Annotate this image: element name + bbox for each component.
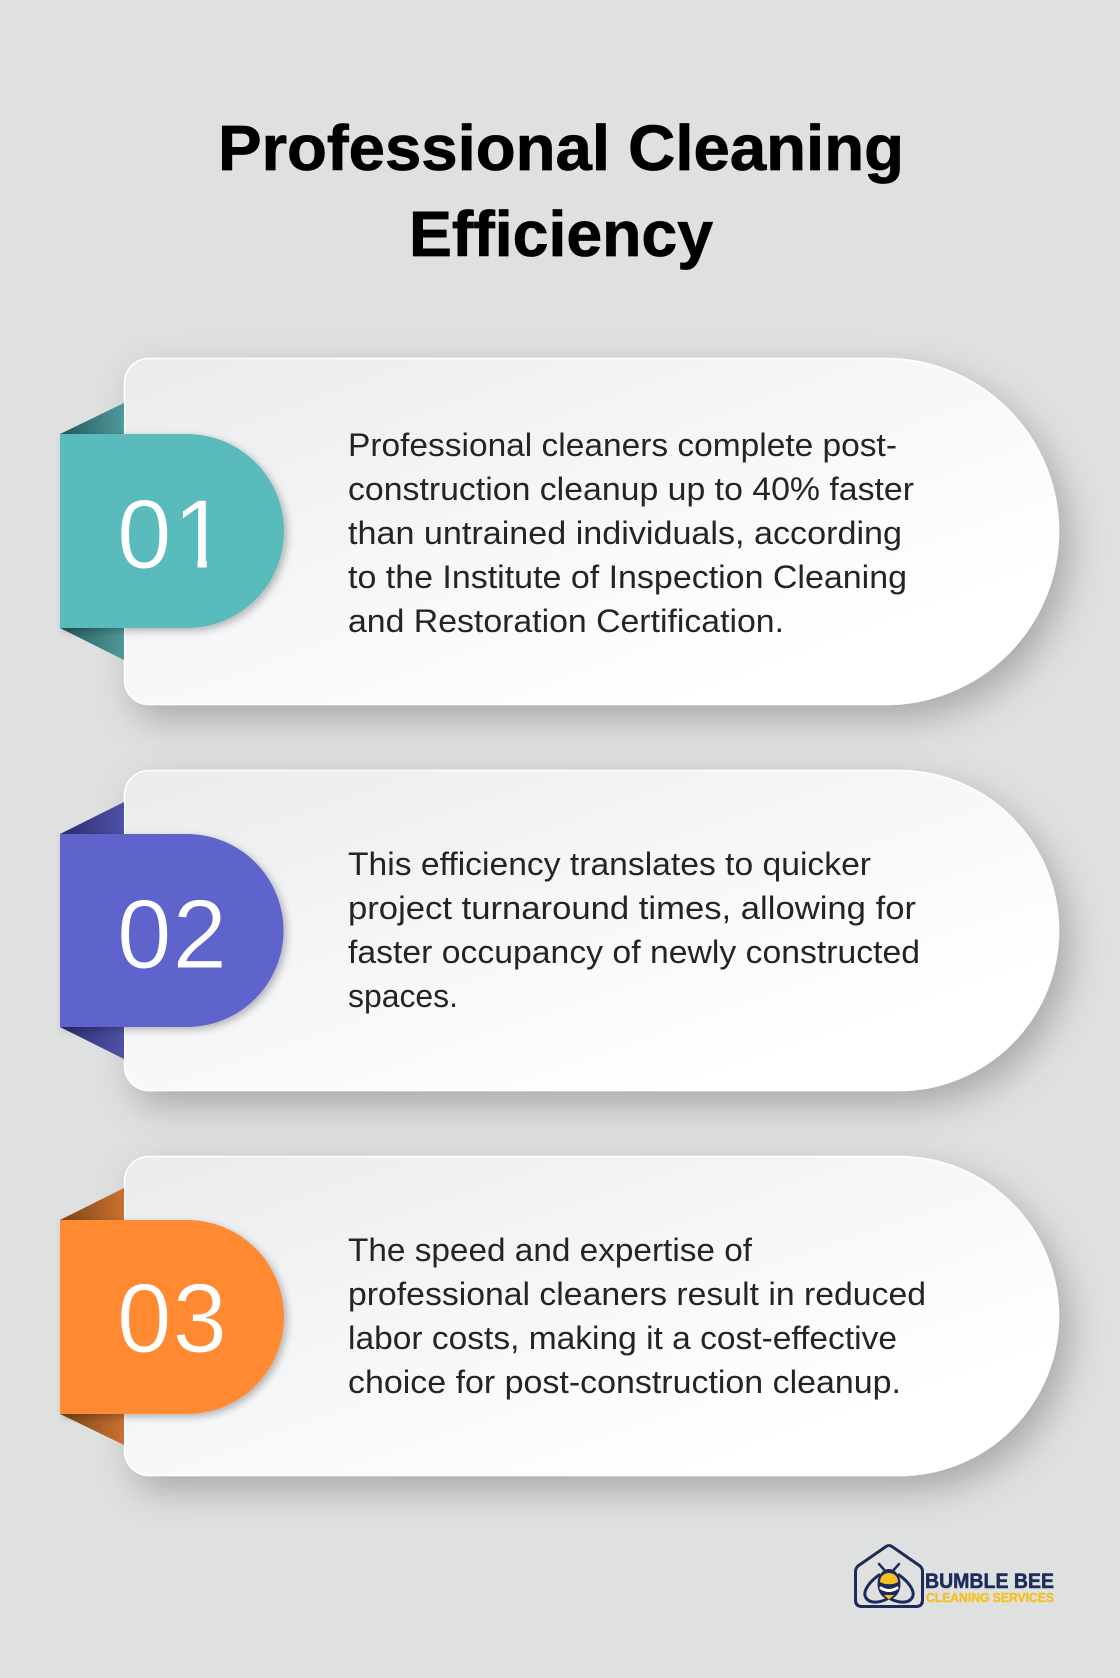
text: step 02: project turnaround times, allowing for	[348, 890, 916, 926]
text: step 01: construction cleanup up to 40% faster	[348, 471, 914, 507]
text: step 01: and Restoration Certification.	[348, 603, 784, 639]
number: 03: 03	[117, 1263, 228, 1373]
text: step 01: than untrained individuals, according	[348, 515, 902, 551]
card: step 03	[124, 1156, 1058, 1476]
text: step 03	[348, 1232, 926, 1400]
text: step 02: This efficiency translates to quicker	[348, 846, 871, 882]
icon: house with bee	[856, 1546, 922, 1606]
card: step 02	[124, 770, 1058, 1090]
title: Professional Cleaning	[218, 112, 904, 184]
text: step 03: choice for post-construction cleanup.	[348, 1364, 901, 1400]
number badge: step 02	[60, 834, 284, 1027]
ribbon fold: step 01	[60, 403, 124, 660]
number: 02: 02	[117, 879, 228, 989]
text: step 01: Professional cleaners complete post-	[348, 427, 897, 463]
text: step 02	[348, 846, 920, 1014]
text: step 01	[348, 427, 914, 639]
text: step 01: to the Institute of Inspection Cleaning	[348, 559, 907, 595]
ribbon fold: step 03	[60, 1188, 124, 1445]
panel: step 02	[60, 770, 1058, 1090]
title: Efficiency	[409, 198, 713, 270]
text: step 02: faster occupancy of newly constructed	[348, 934, 920, 970]
number: 01: 01	[117, 479, 228, 589]
title	[218, 112, 904, 270]
logo	[856, 1546, 1054, 1606]
number badge: step 03	[60, 1220, 284, 1414]
tagline: CLEANING SERVICES	[926, 1590, 1054, 1605]
panel: step 03	[60, 1156, 1058, 1476]
text: step 03: labor costs, making it a cost-effective	[348, 1320, 897, 1356]
card: step 01	[124, 358, 1058, 704]
text: step 02: spaces.	[348, 978, 458, 1014]
wordmark: BUMBLE BEE	[925, 1570, 1054, 1593]
text: step 03: The speed and expertise of	[348, 1232, 753, 1268]
text: step 03: professional cleaners result in reduced	[348, 1276, 926, 1312]
panel: step 01	[60, 358, 1058, 704]
number badge: step 01	[60, 434, 284, 628]
ribbon fold: step 02	[60, 802, 124, 1059]
